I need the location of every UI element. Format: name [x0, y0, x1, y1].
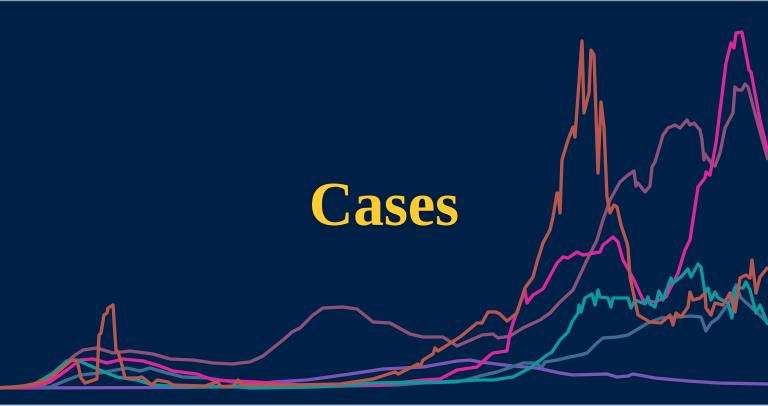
- title: Cases: [309, 171, 459, 239]
- series: mauve line: [0, 84, 768, 388]
- series: slate blue line: [0, 285, 768, 388]
- series: purple line: [0, 360, 768, 388]
- series: teal line: [0, 264, 768, 388]
